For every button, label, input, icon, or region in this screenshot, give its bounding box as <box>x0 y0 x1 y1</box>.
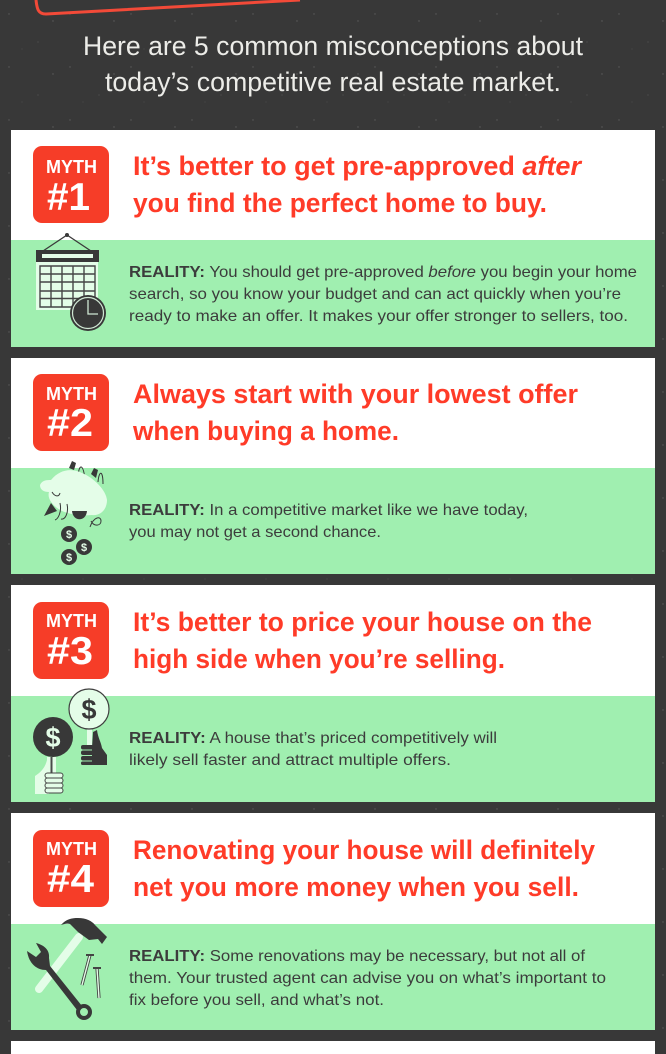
icon: upside-down piggy bank with coins: $ <box>66 552 72 564</box>
myth 3 badge: #3 <box>47 630 93 673</box>
myth 1 heading <box>133 151 582 218</box>
myth 2 reality text <box>129 502 528 541</box>
myth 4 badge: #4 <box>47 858 94 901</box>
myth 4 badge: MYTH <box>46 839 97 859</box>
myth 1 heading: you find the perfect home to buy. <box>133 188 547 218</box>
red title frame fragment <box>36 0 300 14</box>
myth 4 reality text: fix before you sell, and what’s not. <box>129 992 384 1009</box>
subtitle: Here are 5 common misconceptions about <box>83 31 583 61</box>
panel: myth 5 top edge <box>11 1041 655 1054</box>
icon: hands holding dollar signs <box>33 689 109 794</box>
myth 4 reality text: REALITY: Some renovations may be necessary, but not all of <box>129 948 586 965</box>
panel: myth 2 <box>11 358 655 574</box>
icon: upside-down piggy bank with coins: $ <box>66 529 72 541</box>
myth 3 heading: high side when you’re selling. <box>133 644 505 674</box>
myth 4 heading: Renovating your house will definitely <box>133 835 595 865</box>
myth 2 reality text: you may not get a second chance. <box>129 524 381 541</box>
myth 3 reality text <box>129 730 497 769</box>
myth 3 heading: It’s better to price your house on the <box>133 607 592 637</box>
myth 1 reality text <box>129 264 637 325</box>
myth 3 badge: MYTH <box>46 611 97 631</box>
myth 3 reality text: likely sell faster and attract multiple offers. <box>129 752 451 769</box>
icon: hands holding dollar signs: $ <box>46 722 61 753</box>
myth 2 badge <box>33 374 109 451</box>
myth 4 heading <box>133 835 595 902</box>
myth 3 heading <box>133 607 592 674</box>
icon: hammer, wrench and nails <box>27 918 107 1018</box>
icon: upside-down piggy bank with coins: $ <box>81 542 87 554</box>
icon: hands holding dollar signs: $ <box>82 694 97 725</box>
myth 1 reality text: ready to make an offer. It makes your offer stronger to sellers, too. <box>129 308 628 325</box>
myth 2 badge: MYTH <box>46 384 97 404</box>
myth 2 heading <box>132 379 578 446</box>
myth 1 reality text: REALITY: You should get pre-approved before you begin your home <box>129 264 637 281</box>
icon: calendar with clock <box>36 233 106 331</box>
myth 1 heading: It’s better to get pre-approved after <box>133 151 582 181</box>
panel: myth 1 <box>11 130 655 347</box>
subtitle: today’s competitive real estate market. <box>105 67 561 97</box>
myth 2 heading: Always start with your lowest offer <box>133 379 578 409</box>
myth 1 badge: MYTH <box>46 157 97 177</box>
myth 1 badge <box>33 146 109 223</box>
myth 1 badge: #1 <box>47 176 90 219</box>
myth 3 reality text: REALITY: A house that’s priced competitively will <box>129 730 497 747</box>
myth 2 reality text: REALITY: In a competitive market like we have today, <box>129 502 528 519</box>
icon: upside-down piggy bank with coins <box>40 461 107 565</box>
myth 2 badge: #2 <box>47 402 93 445</box>
panel: myth 3 <box>11 585 655 802</box>
myth 2 heading: when buying a home. <box>132 416 399 446</box>
myth 4 heading: net you more money when you sell. <box>133 872 579 902</box>
myth 1 reality text: search, so you know your budget and can act quickly when you’re <box>129 286 621 303</box>
myth 4 reality text <box>129 948 606 1009</box>
subtitle <box>83 31 583 97</box>
panel: myth 4 <box>11 813 655 1030</box>
myth 4 badge <box>33 830 109 907</box>
myth 3 badge <box>33 602 109 679</box>
myth 4 reality text: them. Your trusted agent can advise you on what’s important to <box>129 970 606 987</box>
